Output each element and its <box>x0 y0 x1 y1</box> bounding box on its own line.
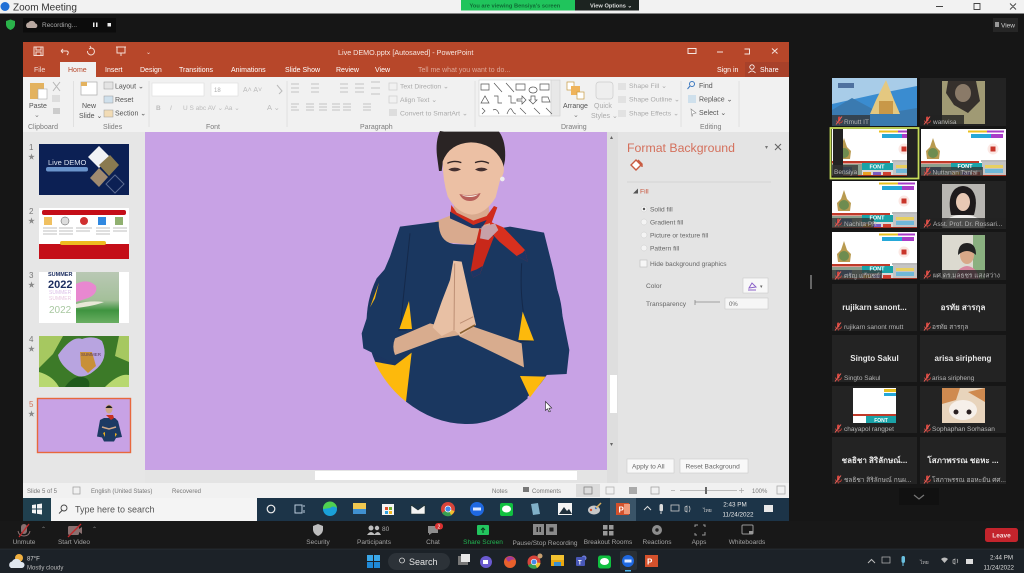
thumbnail 3: 2022 <box>49 305 72 316</box>
thumbnail 3 <box>28 271 129 323</box>
leave button: Leave <box>992 532 1011 540</box>
thumbnail 2 <box>28 207 129 259</box>
icon: windows 11 start <box>367 555 380 568</box>
drawing group: Styles ⌄ <box>591 113 618 120</box>
screen share banner <box>461 0 639 10</box>
drawing group: Drawing <box>561 124 587 131</box>
apps: Apps <box>692 539 707 546</box>
font group: B <box>156 105 161 112</box>
tile: wanvisa <box>920 78 1006 126</box>
tile: Nuttanan Tanlai <box>921 129 1006 176</box>
title and tab bar: Review <box>336 67 360 74</box>
title and tab bar: Live DEMO.pptx [Autosaved] - PowerPoint <box>338 48 473 57</box>
weather widget: 87°F <box>27 556 40 562</box>
editing group: Find <box>699 83 713 90</box>
yellow badge fragments <box>370 283 546 402</box>
tile: Sophaphan Sorhasan: Sophaphan Sorhasan <box>932 426 995 433</box>
title and tab bar: View <box>375 67 391 74</box>
view button <box>993 18 1018 32</box>
icon: zoom logo <box>0 2 10 11</box>
pane buttons: Apply to All <box>632 464 665 470</box>
title and tab bar: Insert <box>105 67 123 74</box>
system tray: 11/24/2022 <box>983 564 1015 572</box>
slides group: Reset <box>115 97 133 104</box>
tile: Nuttanan Tanlai: FONT <box>958 164 973 170</box>
tile: wanvisa: wanvisa <box>932 119 957 126</box>
breakout rooms <box>584 525 633 546</box>
unmute: Unmute <box>13 539 36 546</box>
pinned apps <box>267 501 601 516</box>
vertical scrollbar: ▴ <box>610 135 613 141</box>
drawing group: ⌄ <box>573 112 579 119</box>
window title: Zoom Meeting <box>13 2 77 14</box>
thumbnail 4: 4 <box>29 335 34 344</box>
mouse cursor <box>546 402 552 412</box>
chat: 2 <box>438 524 440 530</box>
thumbnail 4 <box>28 335 129 387</box>
slide thumbnail panel <box>23 132 145 483</box>
paragraph group: Convert to SmartArt ⌄ <box>400 110 468 118</box>
neck <box>435 202 490 245</box>
fill options: Picture or texture fill <box>650 232 709 240</box>
pinned taskbar apps: T <box>578 560 582 566</box>
face <box>443 142 504 215</box>
paragraph group: Paragraph <box>360 124 393 131</box>
participants: Participants <box>357 539 392 546</box>
title and tab bar: Share <box>760 67 779 74</box>
format background pane: ◢ <box>633 189 638 195</box>
ribbon <box>23 77 789 132</box>
status bar: Notes <box>492 489 508 495</box>
tile: chayapol rangpet: chayapol rangpet <box>844 426 894 433</box>
format background pane: Fill <box>640 188 649 196</box>
fill options <box>640 206 727 268</box>
editing group: Editing <box>700 124 722 131</box>
pause and stop recording <box>512 524 578 547</box>
drawing group: Shape Outline ⌄ <box>629 96 680 104</box>
screen share banner: You are viewing Bensiya's screen <box>470 4 561 10</box>
thumbnail 1: Live DEMO <box>48 158 87 167</box>
clipboard group: ⌄ <box>34 112 40 119</box>
status bar: 100% <box>752 489 768 495</box>
title and tab bar: Design <box>140 67 162 74</box>
horizontal scrollbar <box>315 471 577 480</box>
drawing group: Shape Effects ⌄ <box>629 110 679 118</box>
title and tab bar: Tell me what you want to do... <box>418 67 510 74</box>
search pill <box>388 553 450 570</box>
font group <box>152 83 282 131</box>
tile: chayapol rangpet <box>832 386 917 433</box>
reactions <box>643 525 672 546</box>
system tray <box>868 554 1015 572</box>
gallery next page button <box>899 488 939 505</box>
zoom meeting toolbar <box>0 521 1024 549</box>
screen share banner: View Options ⌄ <box>590 4 632 10</box>
font group: U S abc AV ⌄ Aa ⌄ <box>183 105 240 112</box>
color and transparency controls: ▾ <box>760 284 763 290</box>
thumbnail 1 <box>28 143 129 195</box>
recording indicator <box>23 18 116 32</box>
tile: Thai named woman <box>920 232 1006 280</box>
font group: 18 <box>214 88 221 94</box>
slides group: Section ⌄ <box>115 110 146 118</box>
drawing group: Shape Fill ⌄ <box>629 83 667 90</box>
participants <box>357 526 392 546</box>
tile: Thai named slide <box>832 232 917 280</box>
color and transparency controls: 0% <box>729 302 738 308</box>
tile: Rmutt IT <box>832 78 917 126</box>
slides group: Layout ⌄ <box>115 84 144 90</box>
title and tab bar: ⌄ <box>146 50 151 56</box>
tile: arisa siripheng: arisa siripheng <box>932 375 975 382</box>
font group: I <box>170 105 172 112</box>
search box: Type here to search <box>75 504 155 514</box>
hair <box>437 131 505 171</box>
security shield icon <box>6 20 15 30</box>
thumbnail 1: ★ <box>28 153 35 161</box>
slide canvas <box>145 131 607 470</box>
chat: Chat <box>426 539 440 546</box>
security: Security <box>306 539 330 546</box>
dress <box>362 222 569 424</box>
system tray: ไทย <box>702 507 712 514</box>
tile: Bensiya active speaker: Bensiya <box>834 169 858 176</box>
chat <box>426 523 443 546</box>
status bar: English (United States) <box>91 489 152 495</box>
system tray: 11/24/2022 <box>722 512 754 518</box>
thumbnail 5 active: 5 <box>29 400 34 409</box>
thumbnail 1: 1 <box>29 143 34 152</box>
tile: Asst Prof Dr Rossarin <box>920 181 1006 229</box>
tile: rujikarn: rujikarn sanont... <box>842 303 907 312</box>
presenter figure <box>362 131 569 424</box>
drawing group: Arrange <box>563 103 588 110</box>
window controls <box>936 4 1016 10</box>
status bar: Recovered <box>172 489 201 495</box>
thumbnail 3: SUMMER <box>48 272 72 278</box>
tile: Singto Sakul: Singto Sakul <box>844 375 881 382</box>
pane buttons: Reset Background <box>686 464 740 470</box>
view button: View <box>1001 22 1015 30</box>
badge circle <box>367 263 563 420</box>
zoom title bar <box>0 0 1024 14</box>
slides group <box>79 82 146 131</box>
unmute <box>13 524 46 546</box>
forearms <box>393 323 524 367</box>
format background pane <box>618 132 789 483</box>
pause and stop recording: Pause/Stop Recording <box>512 540 578 547</box>
paragraph group: Text Direction ⌄ <box>400 84 449 90</box>
reactions: Reactions <box>643 539 672 546</box>
thumbnail 3: ★ <box>28 281 35 289</box>
praying hands <box>433 261 476 336</box>
weather widget <box>9 554 63 572</box>
pane buttons <box>627 459 748 473</box>
tile: Singto Sakul: Singto Sakul <box>850 354 899 363</box>
start video: ⌃ <box>92 526 97 533</box>
tile: Thai named 1: ชลธิชา สิริลักษณ์... <box>842 455 907 465</box>
font group: Font <box>206 124 220 131</box>
tile: Sophaphan Sorhasan <box>920 386 1006 433</box>
title and tab bar: Transitions <box>179 67 213 74</box>
thumbnail 2: 2 <box>29 207 34 216</box>
share screen: Share Screen <box>463 539 503 546</box>
tile: Thai named slide: FONT <box>870 266 885 272</box>
clipboard group: Clipboard <box>28 124 58 131</box>
security <box>306 524 330 546</box>
tile: orathai: อรทัย สารกุล <box>932 323 968 331</box>
participant gallery <box>830 78 1006 505</box>
tile: rujikarn: rujikarn sanont rmutt <box>844 324 903 331</box>
tile: Nachita PR: Nachita PR <box>844 221 877 228</box>
font group: A˄ A˅ <box>243 87 262 94</box>
icon: paint bucket <box>631 160 642 170</box>
tile: chayapol rangpet: FONT <box>874 418 888 424</box>
vertical scrollbar: ▾ <box>610 442 613 448</box>
vertical scrollbar <box>607 132 618 483</box>
editing group: Replace ⌄ <box>699 96 732 104</box>
tile: Nachita PR <box>832 181 917 228</box>
fill options: Hide background graphics <box>650 261 727 268</box>
share screen <box>463 525 503 546</box>
system tray: ไทย <box>919 559 929 566</box>
thumbnail 2: ★ <box>28 217 35 225</box>
powerpoint active app <box>610 498 636 521</box>
drawing group <box>479 80 680 131</box>
scarf <box>450 205 528 277</box>
whiteboards <box>729 525 766 546</box>
title and tab bar: File <box>34 67 45 74</box>
editing group: Select ⌄ <box>699 110 726 117</box>
title and tab bar <box>23 42 789 77</box>
tile: Bensiya active speaker <box>830 128 918 178</box>
leave button <box>985 528 1018 542</box>
tile: Rmutt IT: Rmutt IT <box>844 119 869 126</box>
gallery resize handle <box>810 275 812 289</box>
paragraph group <box>291 82 468 131</box>
status bar <box>23 483 789 498</box>
font group: A ⌄ <box>267 103 280 112</box>
thumbnail 4: ★ <box>28 345 35 353</box>
powerpoint active app: P <box>618 506 624 514</box>
thumbnail 3: SUMMER <box>49 296 72 302</box>
title and tab bar: Animations <box>231 67 266 74</box>
slides group: Slide ⌄ <box>79 113 102 120</box>
whiteboards: Whiteboards <box>729 539 766 546</box>
windows 10 taskbar in shared screen <box>23 498 789 521</box>
tile: Thai named woman: ผศ.ดร.มลธชร แสงสว่าง <box>933 272 1000 280</box>
tile: Bensiya active speaker: FONT <box>870 164 885 170</box>
system tray: 2:43 PM <box>723 502 747 508</box>
pane heading: Format Background <box>627 141 735 155</box>
tile: arisa siripheng <box>920 335 1006 382</box>
title and tab bar: Home <box>68 67 87 74</box>
thumbnail 3: SUMMER <box>49 290 72 296</box>
color and transparency controls <box>646 278 768 309</box>
start video <box>58 524 97 546</box>
system tray: 2:44 PM <box>990 554 1013 562</box>
unmute: ⌃ <box>41 526 46 533</box>
apps <box>692 525 707 546</box>
search pill: Search <box>409 557 438 567</box>
home tab <box>60 62 96 77</box>
slides group: Slides <box>103 124 123 131</box>
paragraph group: Align Text ⌄ <box>400 97 437 104</box>
title and tab bar: Slide Show <box>285 67 321 74</box>
thumbnail 3: 3 <box>29 271 34 280</box>
drawing group: Quick <box>594 103 612 110</box>
format background pane: ▾ <box>765 145 768 151</box>
thumbnail 5 active: ★ <box>28 410 35 418</box>
fill options: Pattern fill <box>650 246 680 252</box>
windows 11 taskbar <box>0 549 1024 573</box>
tile: Thai named 1 <box>832 437 917 484</box>
weather widget: Mostly cloudy <box>27 566 63 572</box>
color and transparency controls: Color <box>646 283 663 290</box>
tile: Thai named 1: ชลธิชา สิริลักษณ์ กนผ... <box>844 476 912 484</box>
fill options: Gradient fill <box>650 220 684 226</box>
color and transparency controls: Transparency <box>646 301 687 308</box>
tile: rujikarn <box>832 284 917 331</box>
editing group <box>688 82 732 131</box>
tile: Nuttanan Tanlai: Nuttanan Tanlai <box>932 170 978 176</box>
status bar: Slide 5 of 5 <box>27 489 58 495</box>
thumbnail 5 active <box>28 398 130 452</box>
title and tab bar: Sign in <box>717 67 739 74</box>
tile: orathai <box>920 284 1006 331</box>
tile: Thai named 2 <box>920 437 1006 484</box>
clipboard group <box>28 82 60 131</box>
tile: Thai named 2: โสภาพรรณ ฮอหะยัน ศศ... <box>932 476 1006 484</box>
status bar: Comments <box>532 489 561 495</box>
dress seams <box>398 233 533 342</box>
slides group: New <box>82 103 97 110</box>
breakout rooms: Breakout Rooms <box>584 539 633 546</box>
start video: Start Video <box>58 539 90 546</box>
tile: orathai: อรทัย สารกุล <box>941 303 985 313</box>
thumbnail 3: 2022 <box>48 279 72 291</box>
tile: arisa siripheng: arisa siripheng <box>935 354 992 363</box>
icon: windows start <box>32 504 42 514</box>
thumbnail 4: SUMMER <box>81 352 102 357</box>
search box <box>51 498 257 521</box>
participants: 80 <box>382 526 390 533</box>
tile: Singto Sakul <box>832 335 917 382</box>
fill options: Solid fill <box>650 206 673 214</box>
tile: Nachita PR: FONT <box>870 216 885 222</box>
tile: Thai named slide: ศรัญ แก้นชย์ <box>844 272 880 280</box>
tile: Asst Prof Dr Rossarin: Asst. Prof. Dr. Rossari... <box>933 221 1003 228</box>
recording indicator: Recording... <box>42 22 77 29</box>
pinned taskbar apps: P <box>647 558 653 566</box>
pinned taskbar apps <box>458 551 658 572</box>
clipboard group: Paste <box>29 103 47 110</box>
slide canvas background <box>145 132 618 483</box>
tile: Thai named 2: โสภาพรรณ ชอหะ ... <box>926 455 999 465</box>
powerpoint window <box>23 42 789 498</box>
system tray <box>644 502 773 518</box>
